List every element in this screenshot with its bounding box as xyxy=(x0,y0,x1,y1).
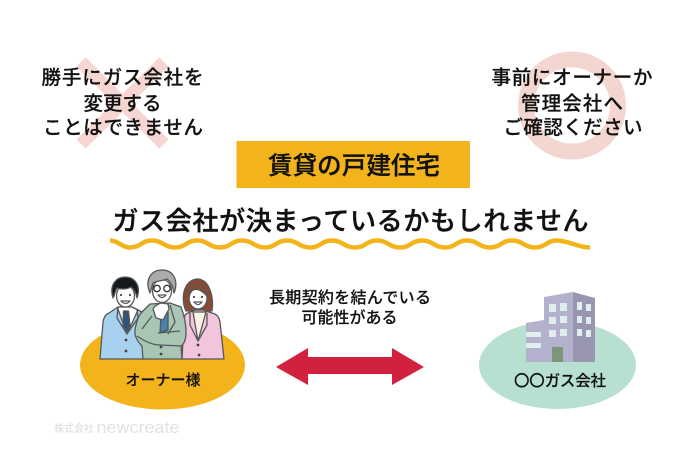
icon: cross mark xyxy=(81,62,164,144)
text: confirm with owner: ご確認ください xyxy=(504,117,642,139)
watermark: newcreate xyxy=(96,418,180,437)
text: cannot change gas company xyxy=(42,67,204,139)
text: confirm with owner xyxy=(492,67,652,139)
owner ellipse xyxy=(80,320,245,410)
panel: gas company xyxy=(479,292,636,409)
text: long-term contract: 長期契約を結んでいる xyxy=(269,289,431,307)
text: confirm with owner: 管理会社へ xyxy=(521,93,623,115)
panel: owner xyxy=(80,270,245,410)
subheading: ガス会社が決まっているかもしれません xyxy=(112,206,588,236)
heading banner: 賃貸の戸建住宅 xyxy=(268,152,440,180)
text: long-term contract xyxy=(269,289,431,327)
left man xyxy=(100,277,146,359)
watermark xyxy=(54,418,180,437)
text: cannot change gas company: ことはできません xyxy=(43,117,203,139)
icon: circle mark xyxy=(526,60,618,152)
middle man xyxy=(135,270,186,359)
panel: prohibited note xyxy=(42,62,204,144)
icon: three owners xyxy=(100,270,224,359)
text: confirm with owner: 事前にオーナーか xyxy=(492,67,652,89)
wavy underline xyxy=(110,240,590,248)
panel: recommended note xyxy=(492,60,652,152)
icon: office building xyxy=(526,292,595,362)
heading banner xyxy=(236,141,470,188)
gas company ellipse xyxy=(479,321,636,409)
arrow: two-way contract xyxy=(276,348,424,385)
text: long-term contract: 可能性がある xyxy=(302,308,398,327)
label: owner: オーナー様 xyxy=(126,372,200,389)
text: cannot change gas company: 変更する xyxy=(84,93,162,115)
right woman xyxy=(182,279,224,359)
label: gas company: 〇〇ガス会社 xyxy=(514,372,606,390)
text: cannot change gas company: 勝手にガス会社を xyxy=(42,67,204,89)
watermark: 株式会社 xyxy=(54,422,94,435)
